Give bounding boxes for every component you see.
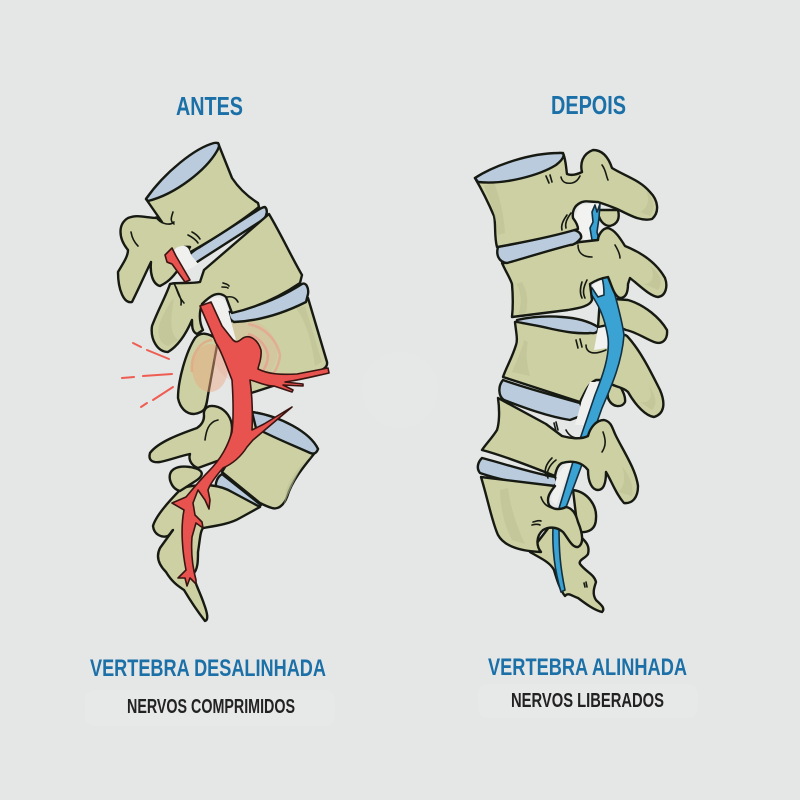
heading: antes: ANTES: [176, 91, 243, 121]
illustration: misaligned spine: [118, 143, 329, 621]
second disc: [517, 316, 598, 333]
lower spinous lobes behind: [598, 298, 667, 343]
top endplate: [146, 143, 219, 201]
fourth vertebra with process: [482, 398, 638, 503]
third vertebra process with inflammation: [178, 334, 218, 414]
top disc: [189, 207, 267, 262]
fifth vertebra with hooked process: [481, 477, 582, 552]
lower disc: [216, 474, 261, 507]
small upper nerve: [165, 248, 190, 282]
sacrum: [153, 485, 260, 621]
fifth nerve segment: [553, 526, 565, 592]
fourth disc: [478, 458, 557, 486]
label: right subtitle: NERVOS LIBERADOS: [511, 690, 664, 712]
label: left title: VERTEBRA DESALINHADA: [90, 655, 326, 682]
label: left subtitle: NERVOS COMPRIMIDOS: [127, 696, 295, 718]
top endplate: [475, 153, 564, 183]
lower spinous lobe: [170, 467, 202, 491]
inflamed area: [192, 320, 280, 392]
top vertebra with process: [475, 150, 657, 247]
second vertebra with process: [502, 228, 666, 317]
blue nerve: [553, 204, 624, 530]
illustration: aligned spine: [475, 150, 667, 612]
main red nerve: [172, 302, 329, 586]
top disc: [497, 230, 581, 263]
top vertebra with process: [118, 143, 259, 302]
third body and process: [503, 318, 663, 417]
foramen top background: [172, 246, 198, 271]
pain lines: [122, 343, 173, 407]
label: right title: VERTEBRA ALINHADA: [488, 654, 687, 681]
second vertebra with process: [152, 214, 302, 352]
third disc: [499, 380, 582, 420]
third vertebra body: [225, 298, 327, 395]
lower spinous process: [149, 406, 232, 468]
foramen middle background: [206, 298, 236, 340]
heading: depois: DEPOIS: [551, 90, 626, 120]
sacrum: [530, 522, 603, 612]
lower vertebra body: [222, 412, 318, 508]
second disc: [229, 284, 308, 322]
foramen backgrounds: [574, 203, 598, 240]
